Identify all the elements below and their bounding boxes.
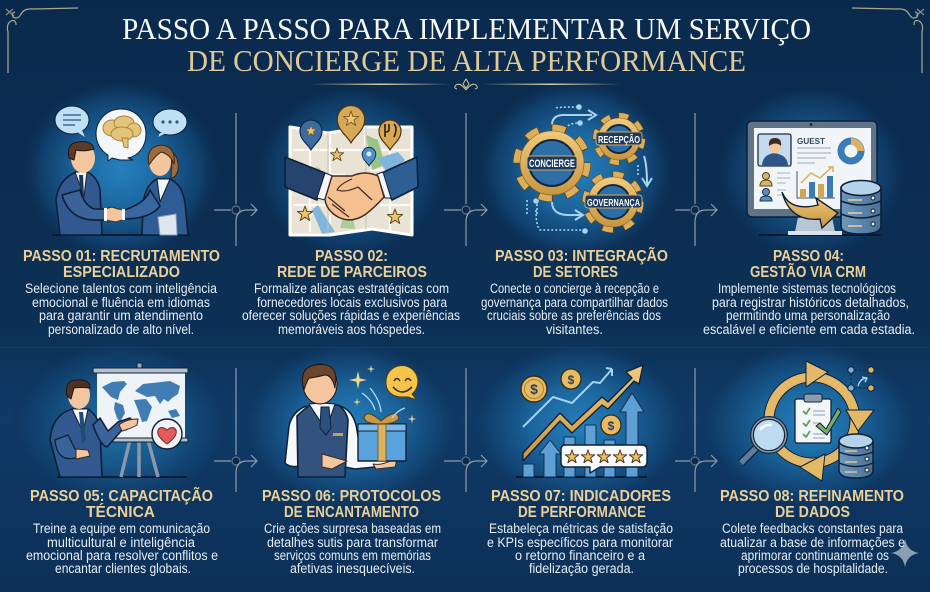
icon: crm monitor [747, 121, 881, 236]
text: passo 02: oferecer soluções rápidas e experiências [242, 308, 460, 323]
heading: passo 03: PASSO 03: INTEGRAÇÃO [495, 247, 668, 265]
gear: recepcao: RECEPÇÃO [598, 133, 640, 146]
icon: performance chart [516, 365, 647, 478]
title [122, 11, 811, 78]
corner ornament: top right [852, 8, 924, 73]
heading: passo 01: ESPECIALIZADO [63, 264, 180, 281]
icon: performance chart: $ [530, 381, 538, 397]
text: passo 04: permitindo uma personalização [726, 308, 890, 323]
title ornament divider [311, 79, 620, 90]
text: passo 04 [703, 281, 915, 337]
text: passo 06: afetivas inesquecíveis. [290, 561, 415, 576]
text: passo 04: Implemente sistemas tecnológicos [718, 281, 896, 296]
panel: passo 08 [720, 361, 905, 576]
icon: performance chart: $ [568, 373, 575, 387]
title: PASSO A PASSO PARA IMPLEMENTAR UM SERVIÇO [122, 11, 811, 46]
text: passo 07: o retorno financeiro e a [515, 548, 645, 563]
text: passo 01: Selecione talentos com inteligência [25, 281, 217, 296]
heading: passo 06: DE ENCANTAMENTO [284, 504, 419, 521]
text: passo 03 [481, 281, 668, 337]
connector arrow 7 to 8 [675, 368, 717, 492]
icon: concierge with gift [285, 364, 418, 477]
text: passo 04: para registrar históricos detalhados, [712, 295, 909, 310]
heading: passo 02: PASSO 02: [315, 248, 388, 265]
heading: passo 07: PASSO 07: INDICADORES [491, 488, 671, 505]
text: passo 03: cruciais sobre as preferências dos [487, 308, 661, 323]
text: passo 07: fidelização gerada. [529, 561, 634, 576]
text: passo 01: para garantir um atendimento [39, 308, 203, 323]
heading: passo 03: DE SETORES [533, 264, 618, 281]
text: passo 03: governança para compartilhar dados [481, 295, 668, 310]
icon: map with handshake [285, 106, 418, 235]
heading: passo 06: PASSO 06: PROTOCOLOS [262, 488, 441, 505]
heading: passo 02: REDE DE PARCEIROS [277, 264, 427, 281]
text: passo 02: fornecedores locais exclusivos para [257, 295, 447, 310]
connector arrow 3 to 4 [675, 113, 717, 246]
text: passo 08: Colete feedbacks constantes para [722, 521, 903, 536]
icon: recruitment handshake [52, 106, 190, 236]
text: passo 02: memoráveis aos hóspedes. [278, 322, 425, 337]
heading: passo 02 [277, 248, 427, 281]
gear: governanca: GOVERNANÇA [587, 198, 640, 209]
corner ornament: top left [6, 8, 78, 73]
gear: concierge: CONCIERGE [529, 158, 575, 170]
heading: passo 01: PASSO 01: RECRUTAMENTO [23, 248, 220, 265]
text: passo 05: encantar clientes globais. [55, 561, 191, 576]
connector arrow 1 to 2 [214, 113, 257, 246]
text: passo 06: detalhes sutis para transformar [267, 535, 438, 550]
title: DE CONCIERGE DE ALTA PERFORMANCE [187, 43, 746, 78]
icon: performance chart: $ [608, 419, 615, 433]
text: passo 02 [242, 281, 460, 337]
text: passo 07 [487, 521, 673, 576]
text: passo 04: escalável e eficiente em cada estadia. [703, 322, 915, 337]
icon: crm monitor: GUEST [797, 137, 825, 146]
panel: passo 01 [23, 106, 220, 337]
text: passo 05 [26, 521, 218, 576]
heading: passo 04: PASSO 04: [773, 248, 844, 265]
icon: sparkle watermark [891, 539, 919, 567]
icon: data refinement cycle [741, 361, 874, 481]
text: passo 08 [720, 521, 905, 576]
text: passo 08: atualizar a base de informações e [720, 535, 905, 550]
connector arrow 2 to 3 [444, 113, 487, 246]
text: passo 06: serviços comuns em memórias [274, 548, 431, 563]
icon: training presentation [50, 363, 188, 478]
heading: passo 08 [720, 488, 904, 521]
text: passo 07: e KPIs específicos para monitorar [487, 535, 673, 550]
text: passo 01 [25, 281, 217, 337]
heading: passo 03 [495, 247, 668, 281]
connector arrow 5 to 6 [214, 368, 257, 492]
text: passo 05: multicultural e inteligência [47, 535, 195, 550]
heading: passo 07 [491, 488, 671, 521]
icon: interlocking gears [517, 105, 652, 233]
text: passo 01: personalizado de alto nível. [48, 322, 194, 337]
heading: passo 08: PASSO 08: REFINAMENTO [720, 488, 904, 505]
heading: passo 07: DE PERFORMANCE [518, 504, 646, 521]
text: passo 08: processos de hospitalidade. [738, 561, 888, 576]
text: passo 01: emocional e fluência em idiomas [32, 295, 210, 310]
text: passo 02: Formalize alianças estratégicas com [254, 281, 449, 296]
heading: passo 04: GESTÃO VIA CRM [750, 263, 866, 281]
heading: passo 05: PASSO 05: CAPACITAÇÃO [30, 487, 213, 505]
text: passo 03: visitantes. [546, 322, 603, 337]
heading: passo 05: TÉCNICA [86, 504, 155, 521]
connector arrow 6 to 7 [444, 368, 487, 492]
panel: passo 03 [481, 105, 668, 337]
text: passo 06 [264, 521, 441, 576]
text: passo 05: Treine a equipe em comunicação [33, 521, 210, 536]
text: passo 06: Crie ações surpresa baseadas em [264, 521, 441, 536]
heading: passo 01 [23, 248, 220, 281]
panel: passo 02 [242, 106, 460, 337]
text: passo 07: Estabeleça métricas de satisfação [489, 521, 673, 536]
heading: passo 08: DE DADOS [775, 504, 850, 521]
text: passo 03: Conecte o concierge à recepção e [490, 281, 659, 296]
heading: passo 04 [750, 248, 866, 281]
heading: passo 05 [30, 487, 213, 521]
text: passo 05: emocional para resolver conflitos e [26, 548, 218, 563]
panel: passo 04 [703, 121, 915, 337]
panel: passo 06 [262, 364, 441, 576]
panel: passo 05 [26, 363, 218, 576]
text: passo 08: aprimorar continuamente os [741, 548, 889, 563]
heading: passo 06 [262, 488, 441, 521]
panel: passo 07 [487, 365, 673, 576]
